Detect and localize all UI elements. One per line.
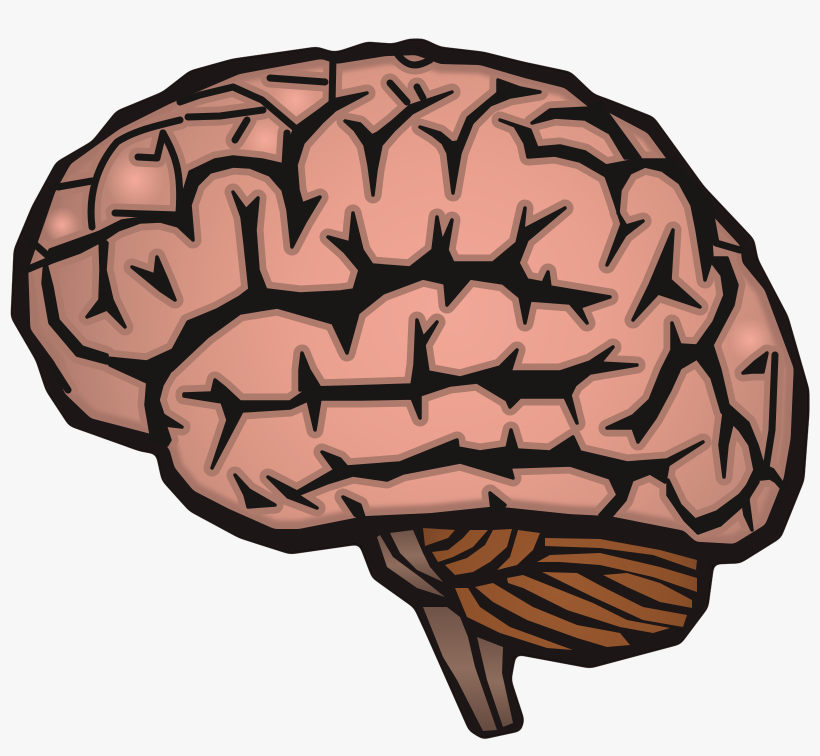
highlights on outer folds [44, 78, 772, 362]
cerebral cortex base [33, 60, 789, 539]
brainstem [377, 530, 513, 731]
sulci black folds [26, 55, 785, 533]
cerebellum [423, 528, 697, 650]
sulci rims [26, 55, 785, 533]
